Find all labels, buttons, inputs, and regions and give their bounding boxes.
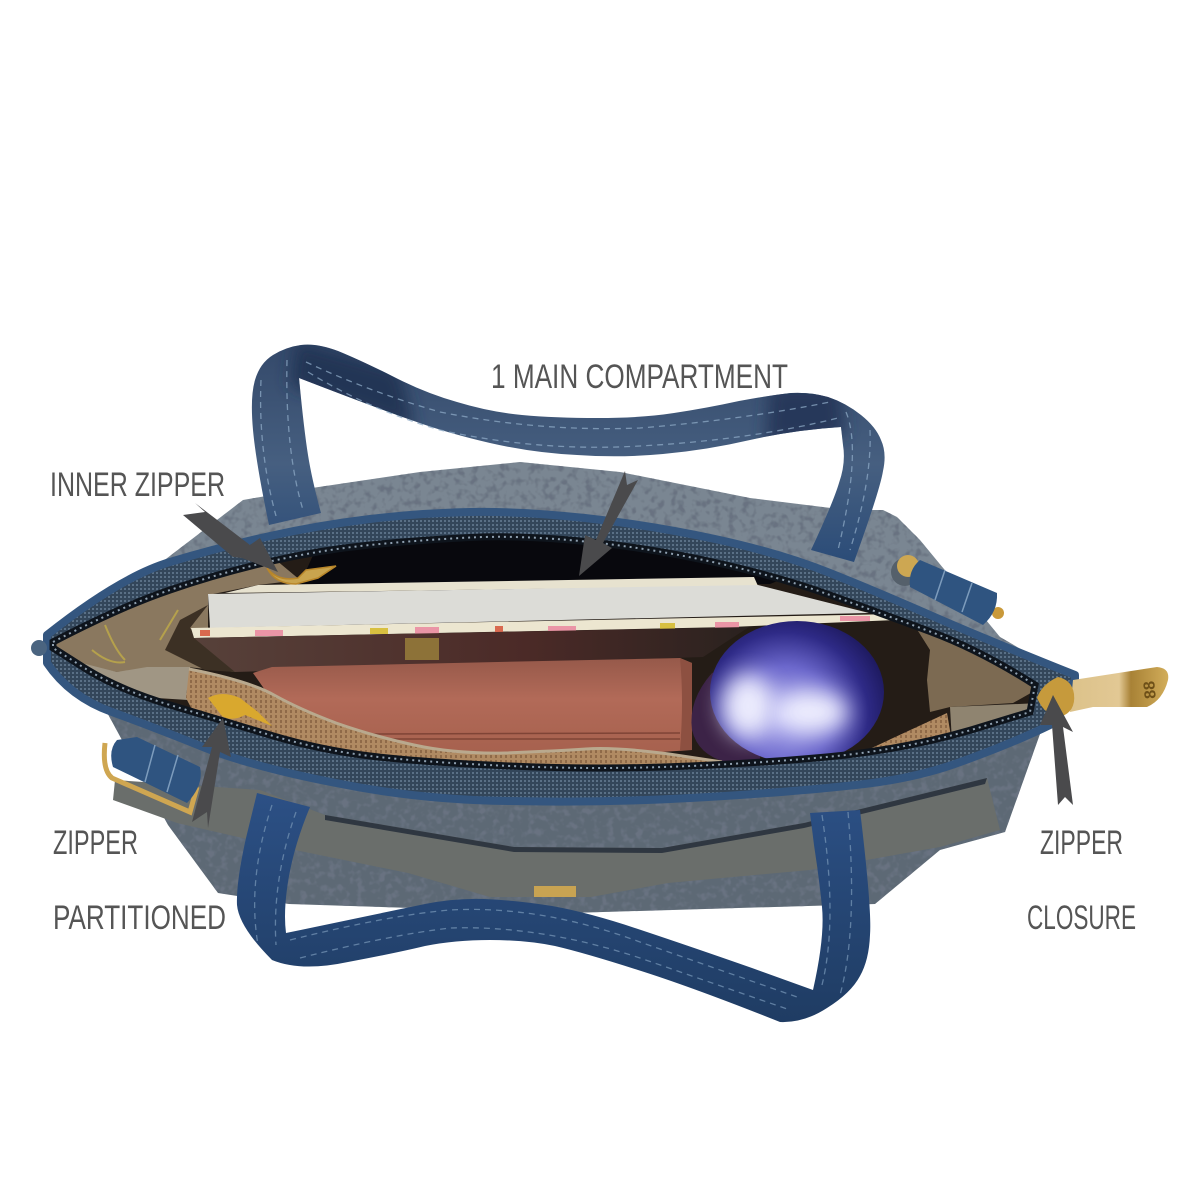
front handle <box>237 793 870 1022</box>
label: inner zipper: INNER ZIPPER <box>50 466 225 504</box>
main zipper pull <box>1037 667 1168 717</box>
back handle <box>252 340 885 562</box>
purple jar <box>691 621 884 763</box>
terracotta pencil case <box>253 658 692 760</box>
lining: left <box>56 563 297 672</box>
tan inner zipper <box>186 668 950 764</box>
bag body: lower pebbled front <box>103 705 1045 913</box>
gold clasp <box>405 638 439 660</box>
book patterned cover <box>191 614 896 638</box>
arrow: main compartment <box>579 471 638 576</box>
partition zipper pull <box>208 694 272 726</box>
dark interior <box>116 556 1030 761</box>
label: zipper, left: ZIPPER <box>53 824 138 862</box>
taupe right pocket <box>950 704 1028 732</box>
infographic: handbag interior with feature labels <box>31 344 1168 1022</box>
gray leather front pocket <box>113 778 1000 897</box>
zipper tape and piping around the opening <box>47 512 1075 802</box>
bag interior contents, clipped to the opening <box>56 540 1032 764</box>
zipper teeth along the opening <box>53 537 1035 768</box>
bag tip knot <box>31 640 47 656</box>
label: partitioned: PARTITIONED <box>53 899 226 937</box>
dark wedge beside book <box>165 605 235 672</box>
label: main compartment: 1 MAIN COMPARTMENT <box>491 358 788 396</box>
right strap tab with gold studs <box>891 555 1004 625</box>
arrow: inner zipper <box>183 503 278 572</box>
book pages <box>208 585 869 628</box>
inner zipper pull <box>267 566 336 584</box>
lining pattern <box>92 610 178 662</box>
left strap tab with gold ring <box>104 737 201 812</box>
label: closure: CLOSURE <box>1027 899 1136 937</box>
arrow: partitioned zipper <box>192 718 231 828</box>
lining: right <box>918 630 1032 712</box>
main zipper pull: 88 <box>1141 680 1160 700</box>
arrow: zipper closure <box>1040 695 1073 805</box>
bag body: back panel <box>60 462 1060 700</box>
book lower edge <box>194 627 749 672</box>
taupe pocket lining <box>84 664 190 700</box>
black gap behind book <box>300 540 800 584</box>
label: zipper, right: ZIPPER <box>1040 824 1123 862</box>
book top strip <box>225 577 758 593</box>
